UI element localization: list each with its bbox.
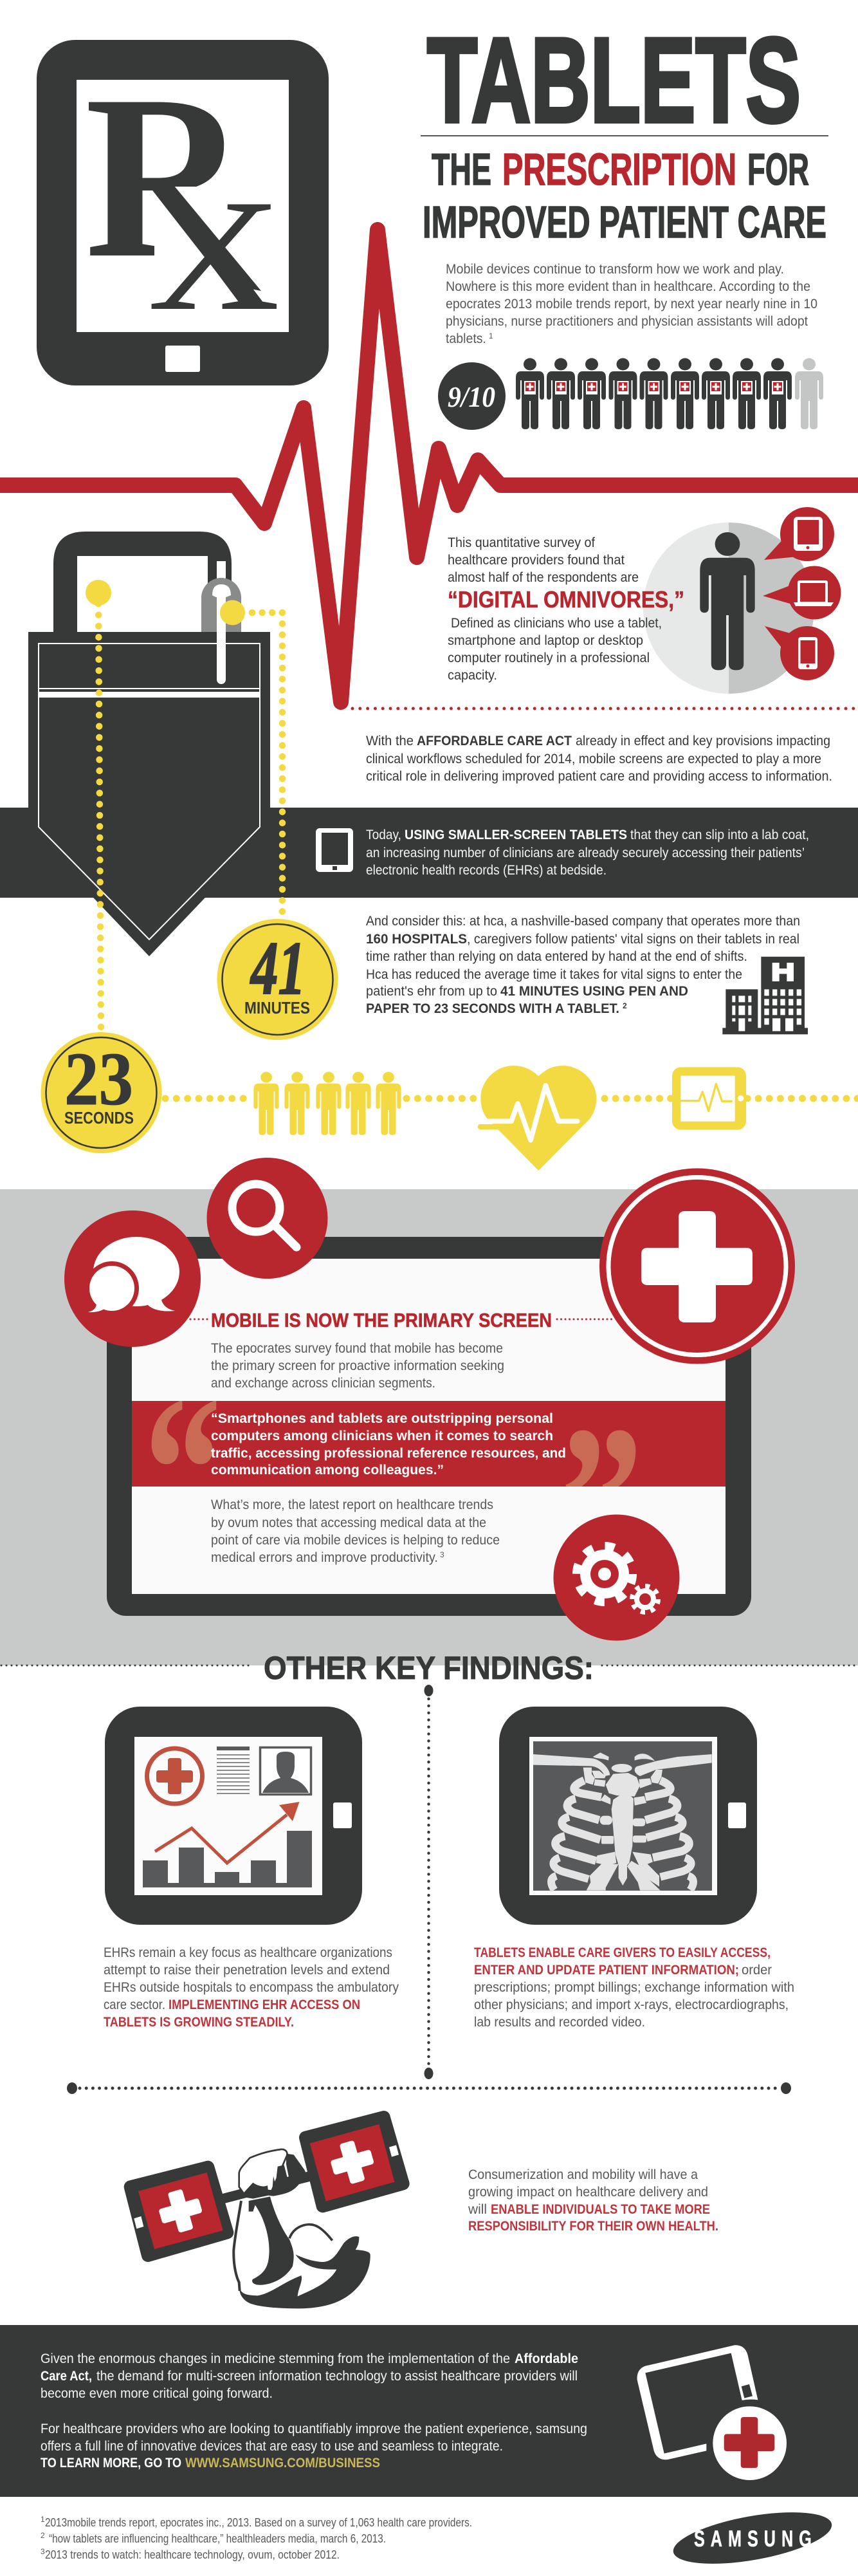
text: ovum xyxy=(211,1497,500,1565)
quote band: traffic, accessing professional reference resources, and xyxy=(211,1446,566,1461)
logo: Samsung: SAMSUNG xyxy=(694,2526,817,2552)
text block: EHRs: EHRs outside hospitals to encompass the ambulatory xyxy=(104,1980,399,1995)
quote band xyxy=(132,1401,726,1487)
quote band: “Smartphones and tablets are outstripping personal xyxy=(211,1411,553,1426)
title: FOR xyxy=(747,144,809,194)
text block: consumerization: ENABLE INDIVIDUALS TO TAKE MORE xyxy=(491,2202,710,2217)
icon: coat pocket with tablet and pen xyxy=(28,532,270,956)
statistic: 41 minutes: MINUTES xyxy=(244,998,310,1017)
statistic: 23 seconds: SECONDS xyxy=(64,1108,134,1127)
text block: intro xyxy=(446,262,817,346)
dividers xyxy=(67,1685,791,2094)
panel: mobile is now the primary screen xyxy=(0,1158,858,1665)
text block: digital omnivores: “DIGITAL OMNIVORES,” xyxy=(448,586,684,613)
footnotes: 2013mobile trends report, epocrates inc., 2013. Based on a survey of 1,063 health care providers. xyxy=(45,2516,472,2529)
text block: digital omnivores: computer routinely in a professional xyxy=(448,651,650,665)
text block: intro: Nowhere is this more evident than in healthcare. According to the xyxy=(446,279,810,294)
panel: closing band xyxy=(0,2325,858,2497)
text block: HCA: PAPER TO 23 SECONDS WITH A TABLET. xyxy=(366,1001,619,1016)
icon: tablet monitor with pulse xyxy=(672,1067,746,1130)
icon: chat bubbles xyxy=(64,1210,201,1347)
text block: digital omnivores: Defined as clinicians who use a tablet, xyxy=(451,616,662,631)
text: closing copy: WWW.SAMSUNG.COM/BUSINESS xyxy=(185,2456,380,2470)
text block: HCA: 2 xyxy=(623,1001,627,1010)
text block: digital omnivores: smartphone and laptop or desktop xyxy=(448,633,643,648)
text block: EHRs: attempt to raise their penetration levels and extend xyxy=(104,1963,390,1978)
heartbeat line xyxy=(0,230,858,709)
text block: consumerization: growing impact on healthcare delivery and xyxy=(468,2185,708,2200)
dark band: smaller-screen tablets: USING SMALLER-SCREEN TABLETS xyxy=(405,828,627,842)
title: THE xyxy=(432,144,491,194)
dark band: smaller-screen tablets: electronic health records (EHRs) at bedside. xyxy=(366,863,607,878)
dark band: smaller-screen tablets: an increasing number of clinicians are already securely accessing their patients’ xyxy=(366,846,805,860)
pictogram: nine of ten clinicians xyxy=(516,358,823,429)
title xyxy=(421,13,828,247)
text block: HCA: , caregivers follow patients' vital signs on their tablets in real xyxy=(467,932,799,947)
text block: EHRs xyxy=(104,1945,399,2030)
icon: tablet with Rx: x xyxy=(149,106,280,358)
text block: care givers: order xyxy=(742,1963,772,1978)
text block: EHRs: TABLETS IS GROWING STEADILY. xyxy=(104,2015,294,2030)
text block: HCA: time rather than relying on data entered by hand at the end of shifts. xyxy=(366,949,747,964)
icon: gears xyxy=(553,1515,679,1641)
text block: HCA: And consider this: at hca, a nashville-based company that operates more than xyxy=(366,914,800,929)
text block: consumerization xyxy=(468,2167,718,2234)
icon: small tablet xyxy=(316,828,353,872)
icon: arm lifting tablet dumbbell xyxy=(131,2117,403,2308)
text block: intro: physicians, nurse practitioners and physician assistants will adopt xyxy=(446,314,808,329)
text: closing copy xyxy=(41,2351,587,2470)
text: survey: The epocrates survey found that mobile has become xyxy=(211,1341,503,1356)
text block: digital omnivores: almost half of the respondents are xyxy=(448,570,639,585)
text block: care givers: prescriptions; prompt billings; exchange information with xyxy=(474,1980,794,1995)
text: ovum: by ovum notes that accessing medical data at the xyxy=(211,1515,486,1530)
text: closing copy: Affordable xyxy=(515,2351,578,2366)
footnotes xyxy=(41,2515,472,2561)
text block: intro: epocrates 2013 mobile trends report, by next year nearly nine in 10 xyxy=(446,297,817,311)
quote band: computers among clinicians when it comes to search xyxy=(211,1429,553,1443)
text block: HCA: 160 HOSPITALS xyxy=(366,932,467,947)
text: closing copy: become even more critical going forward. xyxy=(41,2386,273,2401)
text: closing copy: offers a full line of innovative devices that are easy to use and seamless to integrate. xyxy=(41,2439,503,2454)
footnotes: “how tablets are influencing healthcare,” healthleaders media, march 6, 2013. xyxy=(49,2532,386,2545)
text block: affordable care act xyxy=(366,734,832,784)
text block: consumerization: RESPONSIBILITY FOR THEIR OWN HEALTH. xyxy=(468,2219,718,2234)
text block: affordable care act: critical role in delivering improved patient care and providing access to information. xyxy=(366,769,832,784)
text block: HCA: patient's ehr from up to xyxy=(366,984,497,999)
text block: affordable care act: already in effect and key provisions impacting xyxy=(576,734,830,748)
text: closing copy: For healthcare providers who are looking to quantifiably improve the patient experience, samsung xyxy=(41,2422,587,2436)
statistic: 9/10 badge xyxy=(438,362,506,430)
icon: tablet with plus xyxy=(637,2345,787,2480)
dark band: smaller-screen tablets: that they can slip into a lab coat, xyxy=(630,828,809,842)
text block: intro: tablets. xyxy=(446,331,486,346)
text: closing copy: the demand for multi-screen information technology to assist healthcare providers will xyxy=(96,2369,578,2384)
icon: medical plus xyxy=(599,1169,795,1364)
text: survey xyxy=(211,1341,504,1391)
footnotes: 1 xyxy=(41,2515,45,2524)
text block: digital omnivores xyxy=(448,535,684,683)
text: ovum: medical errors and improve productivity. xyxy=(211,1550,438,1565)
text block: consumerization: Consumerization and mobility will have a xyxy=(468,2167,698,2182)
text: ovum: What’s more, the latest report on healthcare trends xyxy=(211,1497,493,1512)
text: ovum: point of care via mobile devices is helping to reduce xyxy=(211,1533,500,1548)
text block: EHRs: EHRs remain a key focus as healthcare organizations xyxy=(104,1945,392,1960)
dotted timeline xyxy=(165,1095,858,1102)
text block: HCA xyxy=(366,914,800,1016)
icon: hospital xyxy=(722,957,808,1034)
statistic: 23 seconds: 23 xyxy=(64,1037,133,1121)
text: closing copy: TO LEARN MORE, GO TO xyxy=(41,2456,181,2470)
heading: MOBILE IS NOW THE PRIMARY SCREEN xyxy=(211,1309,552,1331)
text: ovum: 3 xyxy=(440,1550,444,1559)
text block: digital omnivores: healthcare providers found that xyxy=(448,553,625,568)
text: closing copy: Care Act, xyxy=(41,2369,92,2384)
text block: affordable care act: AFFORDABLE CARE ACT xyxy=(417,734,572,748)
text block: consumerization: will xyxy=(468,2202,487,2217)
statistic: 41 minutes xyxy=(217,919,338,1040)
statistic: 41 minutes: 41 xyxy=(250,926,306,1010)
heading: other key findings: OTHER KEY FINDINGS: xyxy=(264,1650,594,1686)
icon: tablet with x-ray xyxy=(499,1707,757,1925)
tablet frame xyxy=(107,1237,751,1616)
text block: intro: Mobile devices continue to transform how we work and play. xyxy=(446,262,784,277)
quote band: “ xyxy=(144,1353,221,1588)
text: survey: and exchange across clinician segments. xyxy=(211,1376,435,1391)
footnotes: 3 xyxy=(41,2547,45,2556)
text block: care givers: ENTER AND UPDATE PATIENT INFORMATION; xyxy=(474,1963,739,1978)
dark band: smaller-screen tablets xyxy=(0,808,858,898)
text block: affordable care act: With the xyxy=(366,734,414,748)
title: PRESCRIPTION xyxy=(502,144,736,194)
icon: five yellow people xyxy=(253,1072,401,1135)
icon: person with devices xyxy=(643,507,841,694)
text block: care givers xyxy=(474,1945,794,2030)
icon: tablet with Rx: R xyxy=(85,47,250,306)
icon: tablet with EHR chart xyxy=(105,1707,362,1925)
text block: EHRs: IMPLEMENTING EHR ACCESS ON xyxy=(169,1997,360,2012)
text block: HCA: 41 MINUTES USING PEN AND xyxy=(500,984,688,999)
text: survey: the primary screen for proactive information seeking xyxy=(211,1358,504,1373)
footnotes: 2 xyxy=(41,2531,45,2540)
text block: care givers: other physicians; and import x-rays, electrocardiographs, xyxy=(474,1997,789,2012)
dotted connectors xyxy=(86,580,282,1030)
icon: heart with pulse xyxy=(480,1066,596,1171)
logo: Samsung xyxy=(670,2503,835,2573)
text: closing copy: Given the enormous changes in medicine stemming from the implementation of the xyxy=(41,2351,510,2366)
text block: HCA: Hca has reduced the average time it takes for vital signs to enter the xyxy=(366,967,742,982)
text block: intro: 1 xyxy=(489,331,493,340)
icon: magnifier xyxy=(207,1158,328,1279)
text block: EHRs: care sector. xyxy=(104,1997,165,2012)
text block: digital omnivores: This quantitative survey of xyxy=(448,535,595,550)
quote band: communication among colleagues.” xyxy=(211,1463,444,1478)
text block: care givers: lab results and recorded video. xyxy=(474,2015,645,2030)
text block: digital omnivores: capacity. xyxy=(448,668,497,683)
quote band: ” xyxy=(560,1383,643,1618)
icon: tablet with Rx xyxy=(37,40,329,385)
text block: affordable care act: clinical workflows scheduled for 2014, mobile screens are expected to play a more xyxy=(366,752,821,766)
statistic: 9/10 badge: 9/10 xyxy=(448,380,495,413)
text block: care givers: TABLETS ENABLE CARE GIVERS TO EASILY ACCESS, xyxy=(474,1945,771,1960)
footnotes: 2013 trends to watch: healthcare technology, ovum, october 2012. xyxy=(45,2548,340,2561)
statistic: 23 seconds xyxy=(41,1032,162,1153)
dark band: smaller-screen tablets: Today, xyxy=(366,828,401,842)
